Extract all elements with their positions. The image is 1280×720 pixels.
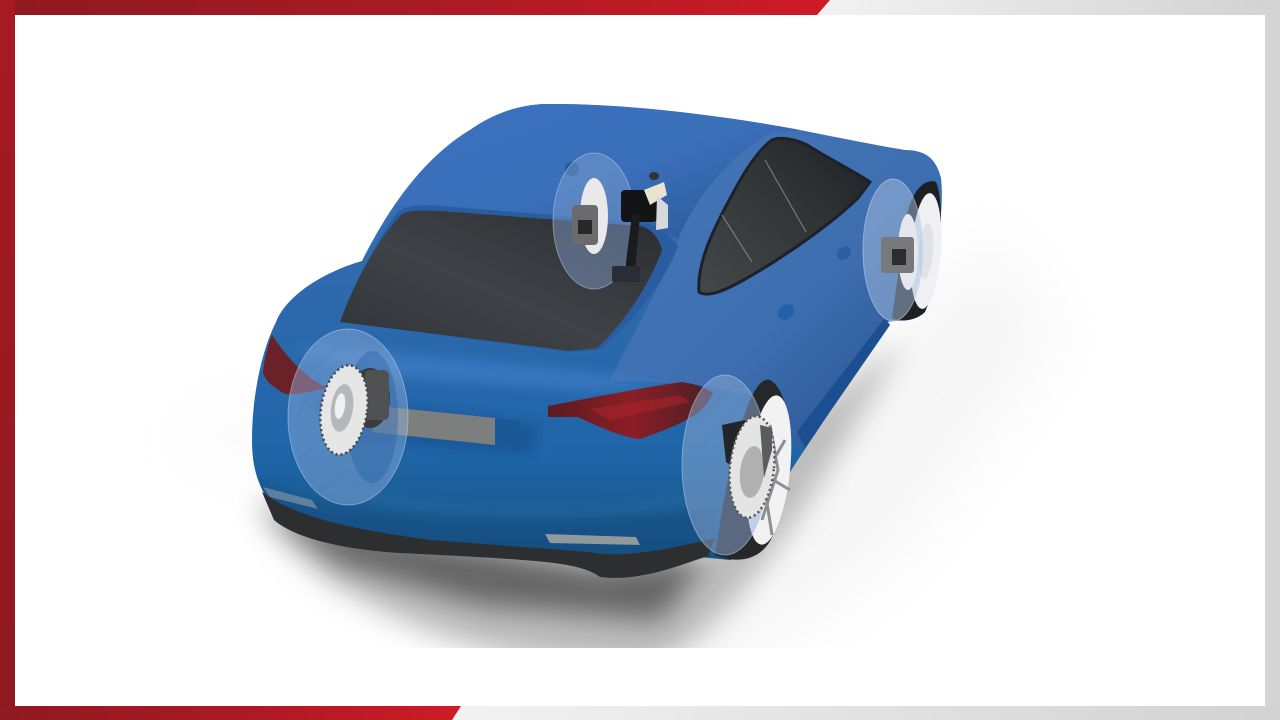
frame: grey bottom strip xyxy=(450,706,1280,720)
left tail light xyxy=(263,335,328,394)
car body xyxy=(252,104,942,565)
frame: grey top strip xyxy=(820,0,1280,15)
front wheel: tyre and rim xyxy=(715,380,798,560)
side panel xyxy=(252,132,941,560)
bright band under rear window xyxy=(290,345,680,392)
lower body darker xyxy=(252,480,710,560)
rear wheel: brake disc and hub xyxy=(315,362,390,458)
front wheel: brake disc xyxy=(722,414,779,520)
rear wheel: translucent tyre xyxy=(288,329,408,505)
frame: grey right strip xyxy=(1265,0,1280,720)
right reflector xyxy=(545,534,640,545)
car xyxy=(252,104,942,578)
rear window xyxy=(340,205,678,352)
dark band around plate xyxy=(397,408,537,454)
roof and upper panels xyxy=(362,104,800,261)
frame: red bottom strip xyxy=(0,706,461,720)
brake actuator unit xyxy=(612,172,668,282)
front wheel: translucent tyre xyxy=(682,375,768,555)
right tail light xyxy=(548,382,713,439)
window pillar lines xyxy=(722,160,806,262)
door handles xyxy=(775,301,797,323)
frame: red top strip xyxy=(0,0,830,15)
top wheel: brake disc and caliper xyxy=(572,178,608,254)
side window xyxy=(699,138,870,294)
licence plate recess xyxy=(372,406,495,445)
left reflector xyxy=(263,487,318,509)
ground shadow xyxy=(249,318,994,648)
light stripe xyxy=(330,490,690,511)
sill stripe xyxy=(797,318,890,448)
far wheel: brake disc and caliper xyxy=(881,214,918,290)
rear bumper trim xyxy=(262,492,715,578)
far-side real wheel xyxy=(892,181,945,320)
frame: red left strip xyxy=(0,0,15,720)
far wheel: translucent tyre xyxy=(863,179,923,321)
mirror base xyxy=(565,162,579,176)
top wheel: translucent tyre xyxy=(553,153,635,289)
